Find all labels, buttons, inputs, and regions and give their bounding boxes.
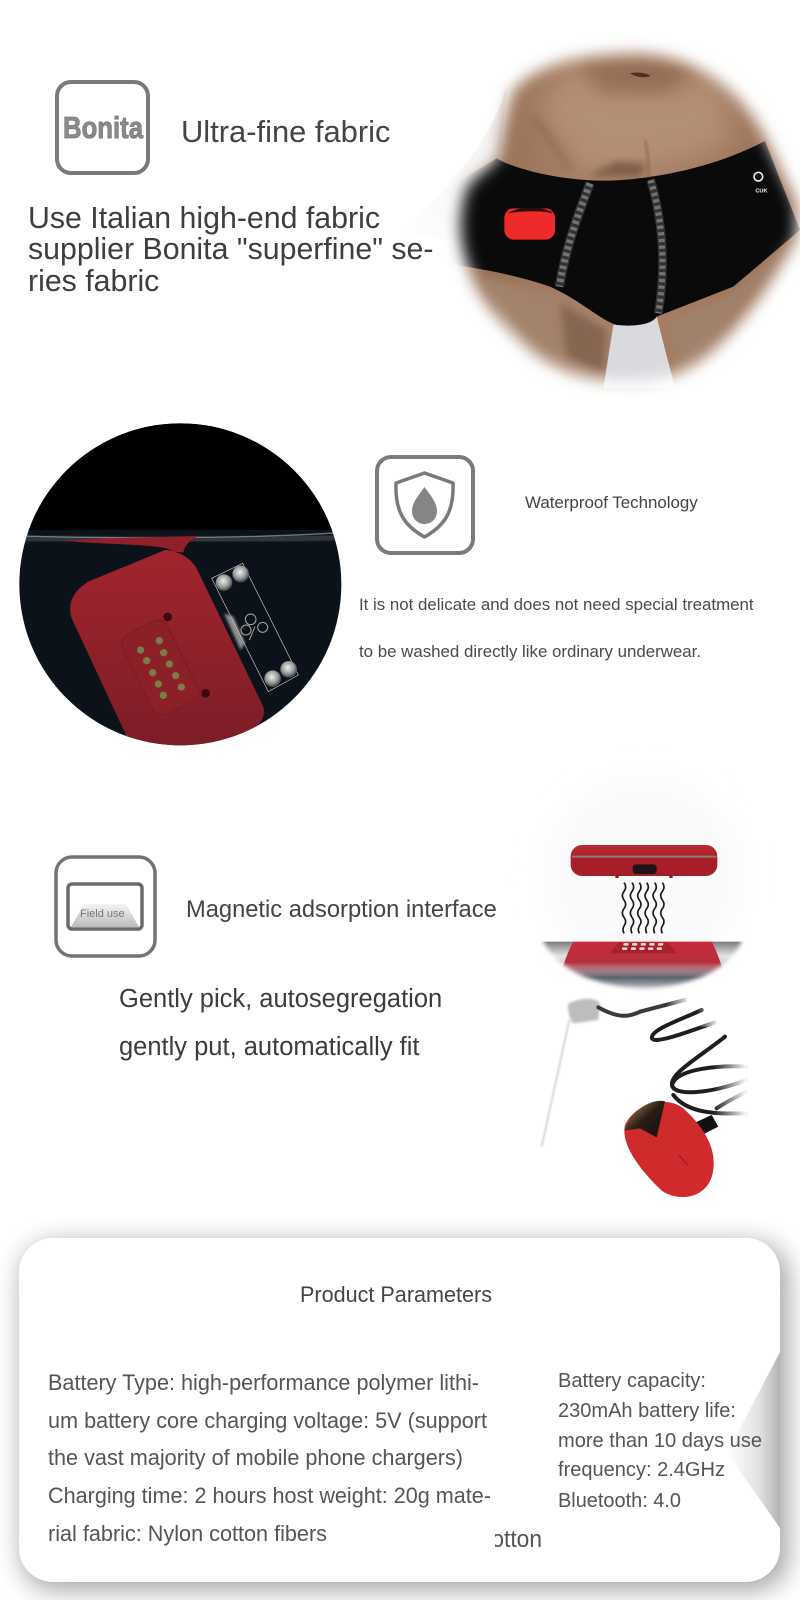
- text block: parameters left column: rial fabric: Nylon cotton fibers: [48, 1521, 327, 1546]
- icon: Bonita logo: Bonita: [63, 110, 144, 145]
- photo: model wearing briefs: [446, 42, 800, 392]
- text block: fabric description: supplier Bonita "superfine" se-: [28, 233, 434, 266]
- heading: product parameters: Product Parameters: [300, 1282, 492, 1307]
- text block: parameters left column: um battery core charging voltage: 5V (support: [48, 1408, 488, 1433]
- clipped text fragment: cotton: [480, 1526, 542, 1553]
- photo: waterproof device close-up: [19, 423, 342, 746]
- text block: parameters right column: [558, 1369, 762, 1512]
- heading: magnetic adsorption interface: Magnetic adsorption interface: [186, 897, 497, 923]
- text block: washing description: [359, 595, 754, 661]
- text block: magnetic description: Gently pick, autosegregation: [119, 985, 442, 1013]
- heading: ultra-fine fabric: Ultra-fine fabric: [181, 114, 390, 149]
- text block: parameters left column: Charging time: 2 hours host weight: 20g mate-: [48, 1483, 491, 1508]
- text block: parameters right column: Bluetooth: 4.0: [558, 1489, 681, 1512]
- icon: Bonita logo: [57, 82, 148, 173]
- text block: parameters left column: Battery Type: high-performance polymer lithi-: [48, 1370, 479, 1395]
- text block: fabric description: Use Italian high-end fabric: [28, 202, 380, 235]
- text block: parameters left column: [48, 1370, 491, 1546]
- icon: waterproof shield: [377, 457, 473, 553]
- text block: washing description: to be washed directly like ordinary underwear.: [359, 642, 701, 661]
- text block: parameters left column: the vast majority of mobile phone chargers): [48, 1445, 463, 1470]
- photo: model wearing briefs: CUK: [755, 189, 768, 195]
- text block: parameters right column: 230mAh battery life:: [558, 1399, 736, 1422]
- photo: device with magnetic connector and cable: [540, 845, 747, 1197]
- text block: parameters right column: more than 10 days use: [558, 1429, 762, 1452]
- text block: parameters right column: Battery capacity:: [558, 1369, 706, 1392]
- decorative wedge: [727, 1352, 780, 1528]
- text block: magnetic description: [119, 985, 442, 1061]
- icon: field use magnetic interface: Field use: [80, 908, 125, 920]
- text block: parameters right column: frequency: 2.4GHz: [558, 1458, 725, 1481]
- panel: product parameters card: [19, 1238, 788, 1590]
- icon: field use magnetic interface: [56, 857, 155, 956]
- text block: fabric description: ries fabric: [28, 265, 159, 298]
- text block: washing description: It is not delicate and does not need special treatment: [359, 595, 754, 614]
- heading: waterproof technology: Waterproof Technology: [525, 493, 698, 512]
- text block: fabric description: [28, 202, 434, 298]
- text block: magnetic description: gently put, automatically fit: [119, 1033, 419, 1061]
